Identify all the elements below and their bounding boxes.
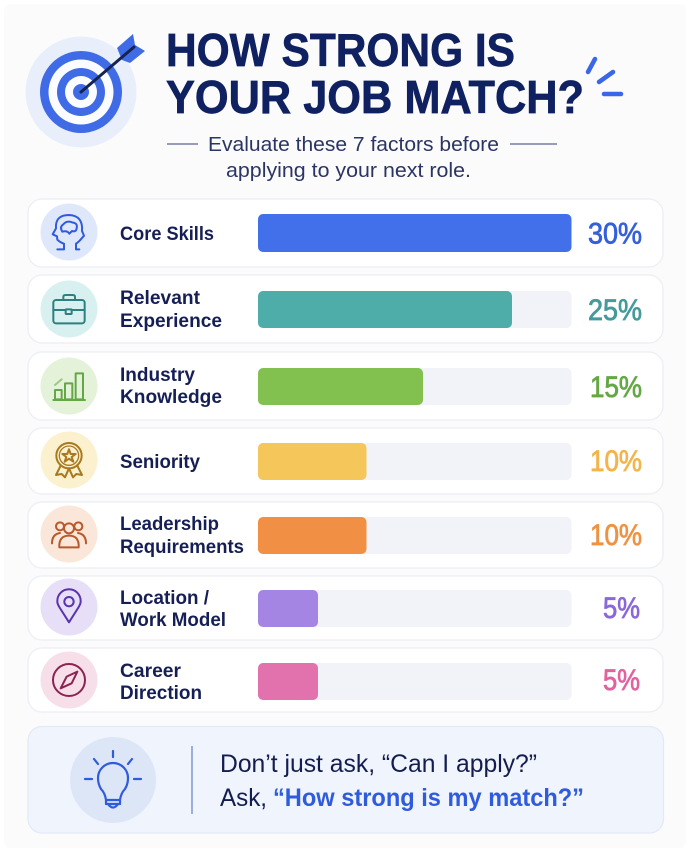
value: 25% bbox=[588, 294, 642, 327]
bar bbox=[258, 291, 572, 328]
bar bbox=[258, 517, 572, 554]
bar bbox=[258, 214, 572, 252]
value: 10% bbox=[590, 519, 642, 552]
icon: head with brain bbox=[40, 204, 98, 260]
label bbox=[120, 364, 222, 408]
icon: award medal bbox=[40, 432, 98, 488]
panel: Core Skills 30% bbox=[28, 199, 663, 267]
icon: group of people bbox=[40, 506, 98, 562]
panel: Location / Work Model 5% bbox=[28, 576, 663, 640]
icon: target with arrow bbox=[26, 34, 145, 148]
bar bbox=[258, 443, 572, 480]
label bbox=[120, 660, 202, 704]
icon: map pin bbox=[40, 578, 98, 636]
label: Relevant bbox=[120, 287, 200, 309]
subtitle: applying to your next role. bbox=[226, 159, 471, 182]
divider bbox=[191, 746, 193, 814]
value: 15% bbox=[590, 371, 642, 404]
subtitle bbox=[167, 133, 557, 182]
callout text bbox=[220, 750, 584, 812]
title: YOUR JOB MATCH? bbox=[166, 71, 584, 123]
callout text: Don’t just ask, “Can I apply?” bbox=[220, 750, 537, 778]
subtitle: Evaluate these 7 factors before bbox=[208, 133, 499, 156]
bar bbox=[258, 590, 572, 627]
panel: Relevant Experience 25% bbox=[28, 275, 663, 343]
callout text: “How strong is my match?” bbox=[273, 784, 584, 812]
icon: briefcase bbox=[40, 280, 98, 338]
label: Knowledge bbox=[120, 386, 222, 408]
value: 5% bbox=[603, 592, 640, 625]
icon: bar chart bbox=[40, 358, 98, 414]
bar bbox=[258, 663, 572, 700]
label: Seniority bbox=[120, 451, 200, 473]
panel: Leadership Requirements 10% bbox=[28, 502, 663, 568]
value: 10% bbox=[590, 445, 642, 478]
title: HOW STRONG IS bbox=[166, 24, 515, 76]
label bbox=[120, 587, 226, 631]
icon: spark lines bbox=[588, 59, 621, 94]
callout bbox=[28, 726, 664, 833]
callout text: Ask, bbox=[220, 784, 267, 812]
value: 30% bbox=[588, 218, 642, 250]
icon: light bulb bbox=[70, 737, 156, 823]
panel: Seniority 10% bbox=[28, 428, 663, 494]
icon: compass bbox=[40, 652, 98, 708]
label: Requirements bbox=[120, 536, 244, 558]
panel: Industry Knowledge 15% bbox=[28, 352, 663, 420]
label: Experience bbox=[120, 310, 222, 332]
label: Direction bbox=[120, 682, 202, 704]
label bbox=[120, 513, 244, 558]
label bbox=[120, 287, 222, 332]
label: Career bbox=[120, 660, 181, 682]
label: Location / bbox=[120, 587, 210, 609]
value: 5% bbox=[603, 664, 640, 697]
title bbox=[166, 24, 584, 123]
label: Industry bbox=[120, 364, 195, 386]
label: Work Model bbox=[120, 609, 226, 631]
bar bbox=[258, 368, 572, 405]
label: Core Skills bbox=[120, 223, 214, 245]
panel: Career Direction 5% bbox=[28, 648, 663, 712]
label: Leadership bbox=[120, 513, 219, 535]
